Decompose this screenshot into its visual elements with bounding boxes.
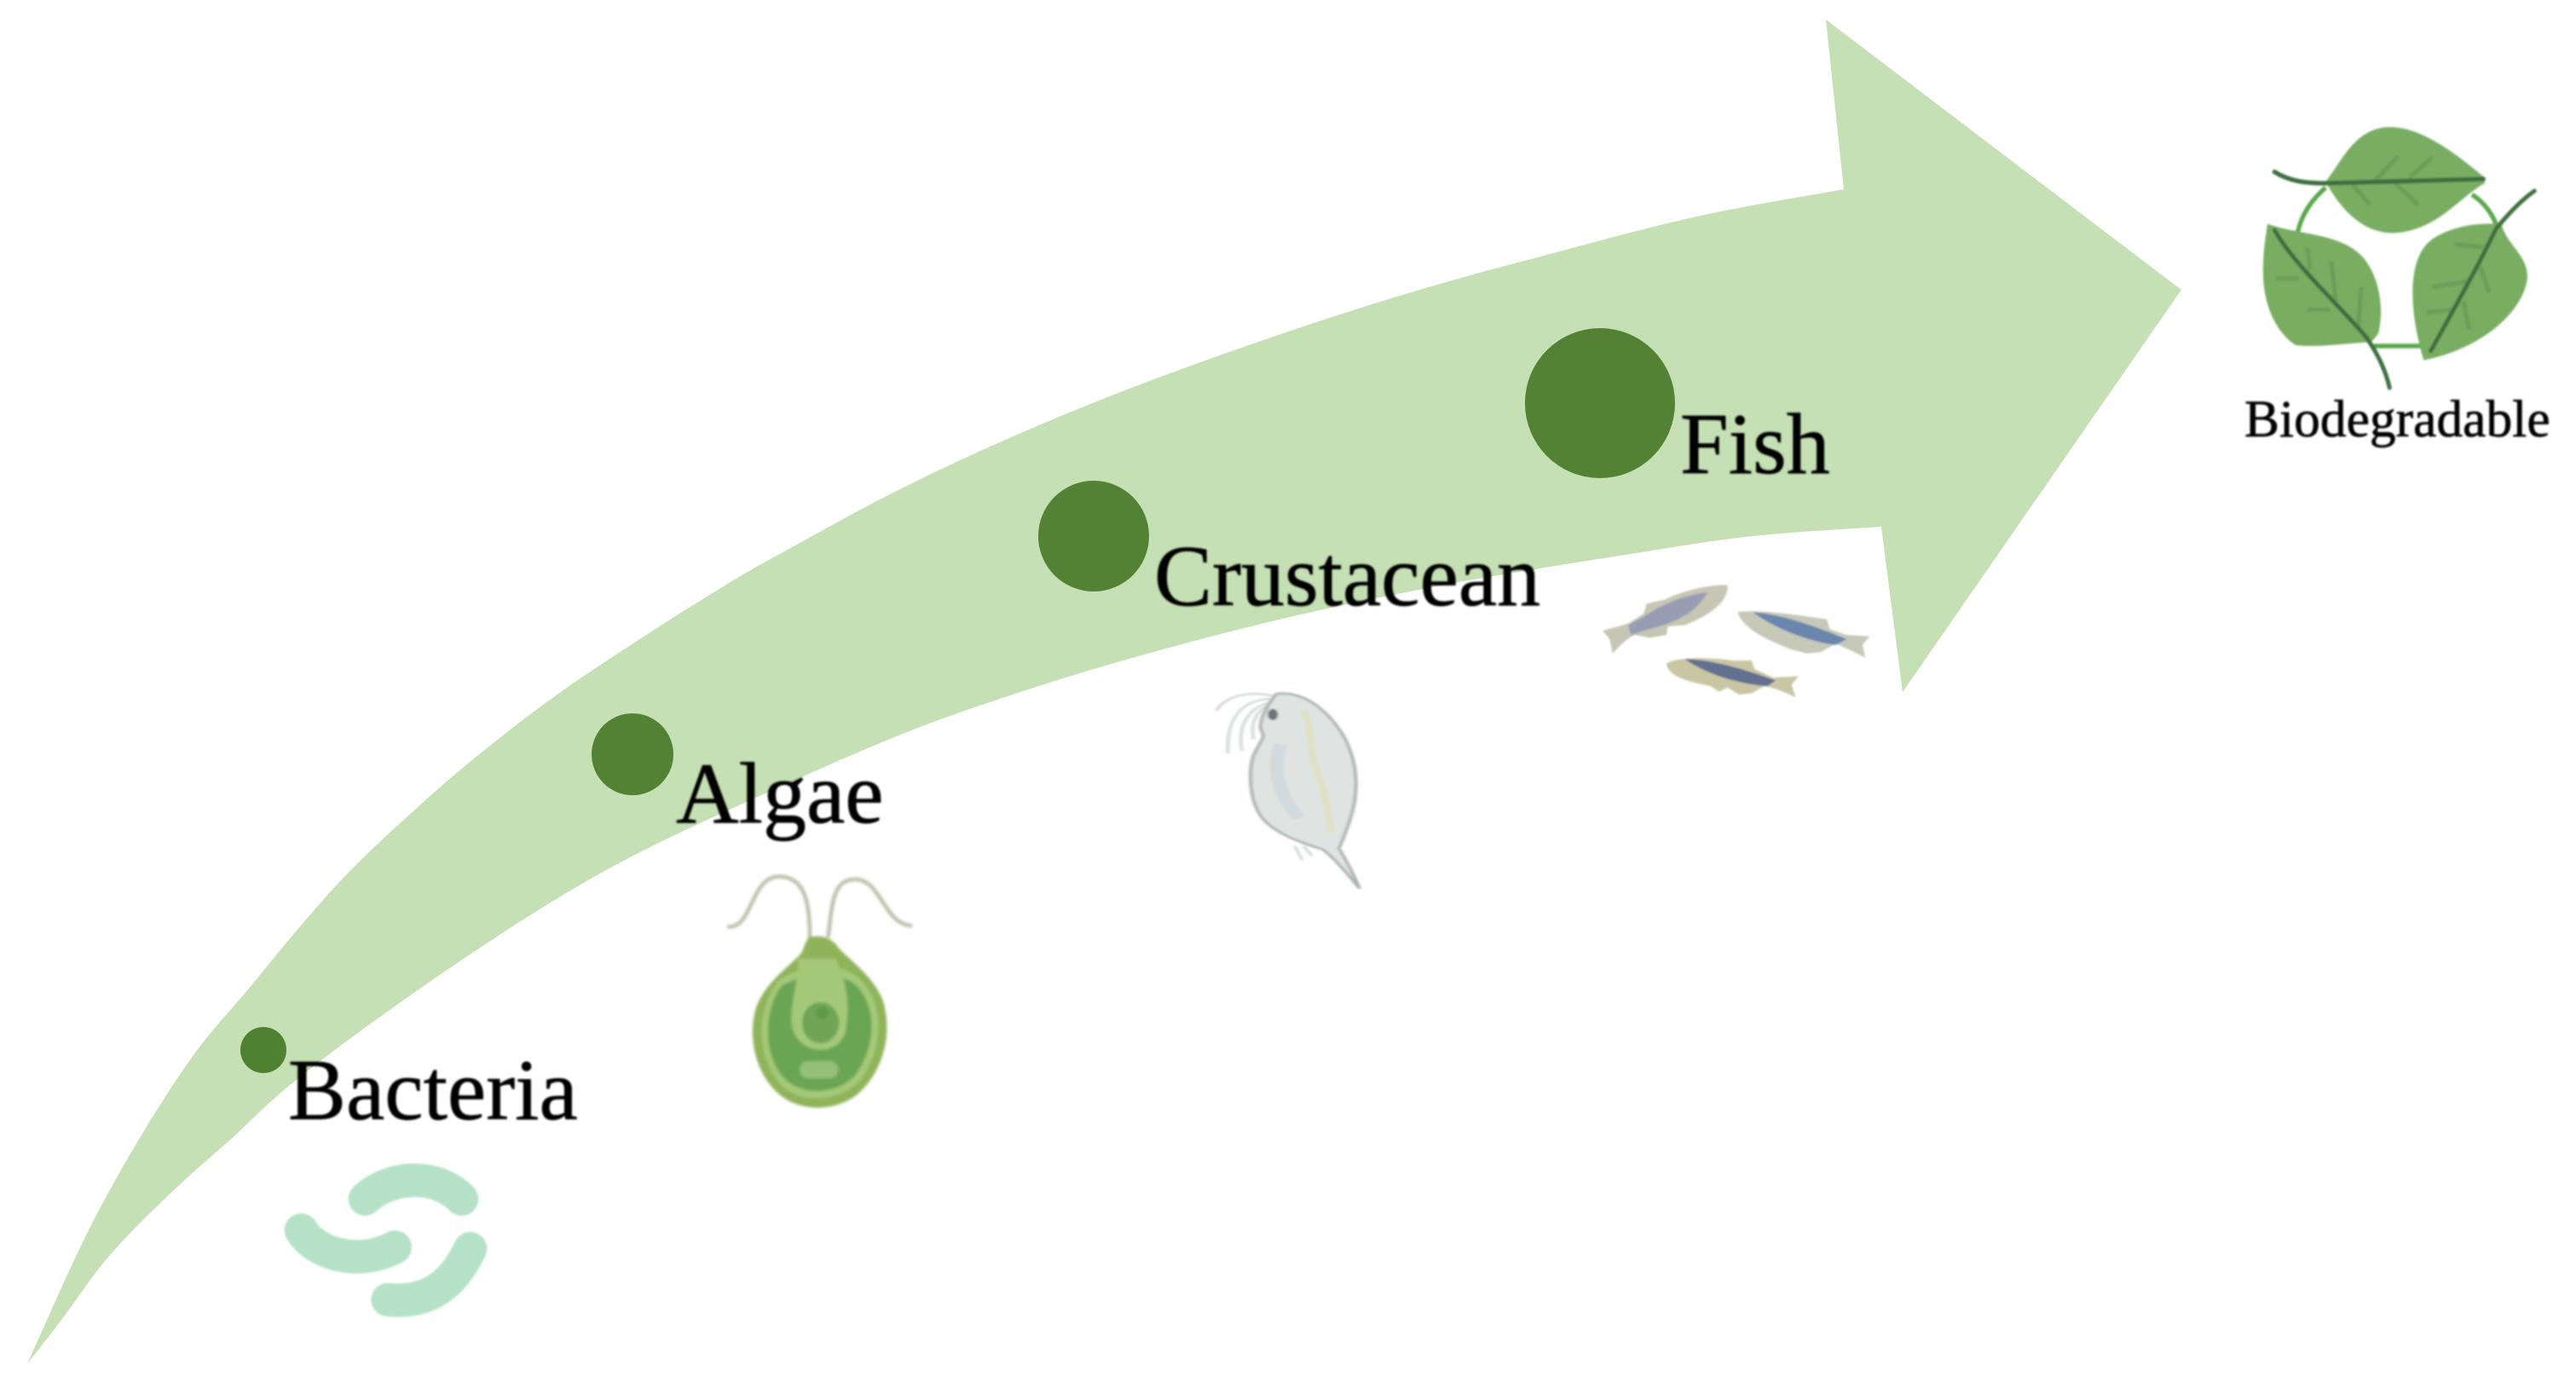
body: [1250, 694, 1360, 889]
label: Biodegradable: Biodegradable: [2244, 390, 2550, 448]
label: Bacteria: Bacteria: [288, 1042, 578, 1139]
stage: bacteria: [240, 1027, 578, 1301]
fish three: [1666, 658, 1799, 697]
label: Crustacean: Crustacean: [1154, 528, 1540, 625]
label: Algae: Algae: [676, 746, 884, 842]
stage: crustacean: [1038, 481, 1540, 889]
stage: algae: [592, 713, 910, 1108]
icon: green alga: [729, 876, 910, 1108]
label: Fish: Fish: [1680, 396, 1830, 493]
cell body: [753, 937, 887, 1108]
leaf left: [2263, 224, 2381, 346]
marker: algae circle: [592, 713, 673, 795]
icon: bacteria: [301, 1180, 471, 1301]
outcome: biodegradable: [2244, 127, 2550, 448]
leaf top: [2325, 127, 2485, 233]
icon: recycling leaves: [2263, 127, 2534, 388]
leaf right: [2412, 223, 2527, 361]
fish one: [1603, 585, 1728, 654]
marker: crustacean circle: [1038, 481, 1149, 592]
flagella: [729, 876, 910, 936]
marker: fish circle: [1525, 328, 1675, 478]
marker: bacteria circle: [240, 1027, 286, 1073]
veins: [2276, 156, 2489, 330]
fish two: [1737, 611, 1869, 658]
stage: fish: [1525, 328, 1869, 697]
icon: water flea: [1216, 694, 1360, 889]
stems: [2274, 172, 2534, 388]
ring: [2297, 188, 2496, 346]
icon: three zebrafish: [1603, 585, 1869, 697]
antennae: [1216, 694, 1311, 859]
